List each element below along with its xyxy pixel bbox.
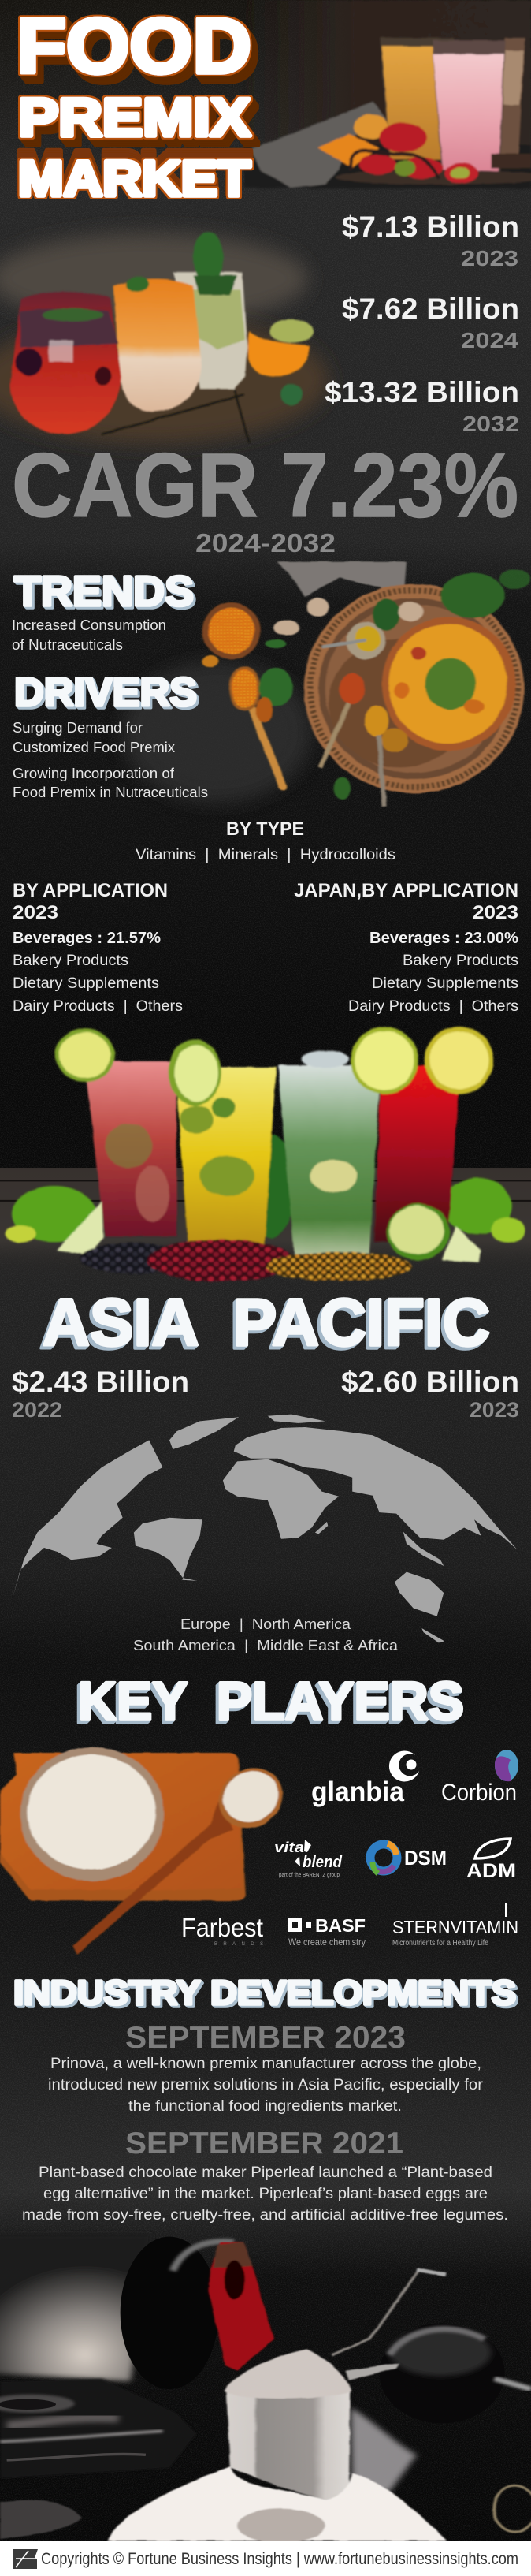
stat: market size 2023: 2023 <box>461 246 518 270</box>
footer logo <box>13 2549 38 2569</box>
driver text: Customized Food Premix <box>13 740 175 755</box>
heading: ASIA PACIFIC: ASIA PACIFIC <box>43 1285 490 1359</box>
stat: market size 2032: $13.32 Billion <box>325 376 519 408</box>
photo: four mojito glasses with limes and berries <box>0 1027 531 1288</box>
logo: vita blend: blend <box>303 1854 343 1871</box>
logo: vita blend: part of the BARENTZ group <box>279 1873 340 1878</box>
logo: DSM: DSM <box>404 1846 447 1870</box>
Japan by application segment: Beverages : 23.00% <box>369 930 518 947</box>
by type segment <box>136 818 395 863</box>
development: September 2023: Prinova, a well-known premix manufacturer across the globe, <box>50 2056 481 2072</box>
title: FOOD PREMIX MARKET <box>17 2 251 207</box>
development: September 2023: introduced new premix solutions in Asia Pacific, especially for <box>48 2077 484 2093</box>
logo: Corbion: Corbion <box>441 1780 517 1806</box>
regional value 2023: 2023 <box>470 1398 519 1422</box>
footer bar <box>0 2541 531 2576</box>
driver text: Growing Incorporation of <box>13 766 175 781</box>
driver text: Food Premix in Nutraceuticals <box>13 785 208 800</box>
photo: three iced drinks <box>0 232 329 443</box>
development: September 2023: the functional food ingredients market. <box>128 2098 402 2115</box>
development: September 2021: Plant-based chocolate maker Piperleaf launched a “Plant-based <box>39 2164 492 2181</box>
title: FOOD PREMIX MARKET: PREMIX <box>18 88 251 147</box>
by application segment <box>13 880 183 1015</box>
Japan by application segment <box>294 880 518 1015</box>
development: September 2023: SEPTEMBER 2023 <box>125 2021 406 2055</box>
logo: glanbia: glanbia <box>311 1776 405 1807</box>
title: FOOD PREMIX MARKET: FOOD <box>17 2 251 89</box>
other regions list <box>133 1616 399 1653</box>
photo: spiced lentil dish on copper plate <box>122 561 530 806</box>
regional value 2023 <box>341 1366 519 1422</box>
stat: market size 2032: 2032 <box>462 412 519 436</box>
development: September 2023 <box>48 2021 484 2115</box>
regional value 2022: 2022 <box>12 1398 62 1422</box>
driver text <box>13 720 208 800</box>
logo: ADM: ADM <box>466 1860 516 1882</box>
title: FOOD PREMIX MARKET: MARKET <box>18 151 251 207</box>
stat: market size 2023 <box>342 211 519 270</box>
stat: market size 2024 <box>342 293 519 352</box>
trend text: Increased Consumption <box>12 617 166 633</box>
trend text: of Nutraceuticals <box>12 637 123 653</box>
Japan by application segment: Bakery Products <box>403 952 518 969</box>
other regions list: South America | Middle East & Africa <box>133 1638 399 1653</box>
logo: vita blend <box>274 1840 343 1878</box>
regional value 2022 <box>12 1366 189 1422</box>
Japan by application segment: 2023 <box>473 902 518 923</box>
photo: protein powder scoop with gym weights <box>0 2234 531 2543</box>
development: September 2021: egg alternative” in the market. Piperleaf’s plant-based eggs are <box>43 2186 488 2202</box>
photo: powder bowl and wooden spoon on board <box>0 1747 292 1955</box>
Japan by application segment: JAPAN,BY APPLICATION <box>294 880 518 901</box>
logo: DSM <box>370 1843 447 1873</box>
driver text: Surging Demand for <box>13 720 143 736</box>
heading: DRIVERS: DRIVERS <box>14 669 197 714</box>
photo: smoothies on a tray <box>237 0 531 188</box>
logo: Farbest Brands: BRANDS <box>214 1942 263 1947</box>
by type segment: BY TYPE <box>226 818 304 840</box>
logo: BASF: We create chemistry <box>288 1937 366 1948</box>
by application segment: Dietary Supplements <box>13 975 159 992</box>
world map globe <box>13 1415 518 1642</box>
development: September 2021: made from soy-free, cruelty-free, and artificial additive-free legumes. <box>22 2207 508 2224</box>
logo: Farbest Brands: Farbest <box>181 1913 263 1942</box>
regional value 2022: $2.43 Billion <box>12 1366 189 1398</box>
heading: TRENDS: TRENDS <box>14 568 194 615</box>
CAGR figure: 2024-2032 <box>195 528 336 557</box>
logo: ADM <box>466 1839 516 1882</box>
logo: BASF <box>288 1915 366 1948</box>
development: September 2021: SEPTEMBER 2021 <box>125 2127 403 2160</box>
by application segment: Bakery Products <box>13 952 128 969</box>
by type segment: Vitamins | Minerals | Hydrocolloids <box>136 847 395 863</box>
trend text <box>12 617 166 653</box>
stat: market size 2024: 2024 <box>461 328 518 352</box>
Japan by application segment: Dietary Supplements <box>372 975 518 992</box>
by application segment: BY APPLICATION <box>13 880 168 901</box>
heading: INDUSTRY DEVELOPMENTS: INDUSTRY DEVELOPMENTS <box>13 1974 516 2012</box>
logo: BASF: BASF <box>315 1915 366 1936</box>
Japan by application segment: Dairy Products | Others <box>348 998 518 1015</box>
other regions list: Europe | North America <box>180 1616 351 1632</box>
logo: Stern Vitamin: STERNVITAMIN <box>392 1917 518 1937</box>
development: September 2021 <box>22 2127 508 2224</box>
stat: market size 2023: $7.13 Billion <box>342 211 519 243</box>
by application segment: Dairy Products | Others <box>13 998 183 1015</box>
heading: KEY PLAYERS: KEY PLAYERS <box>78 1671 464 1732</box>
logo: Stern Vitamin <box>392 1903 518 1948</box>
by application segment: 2023 <box>13 902 58 923</box>
logo: Stern Vitamin: Micronutrients for a Healthy Life <box>392 1939 488 1948</box>
logo: Corbion <box>441 1750 518 1806</box>
regional value 2023: $2.60 Billion <box>341 1366 519 1398</box>
logo: vita blend: vita <box>274 1840 304 1855</box>
by application segment: Beverages : 21.57% <box>13 930 161 947</box>
logo: glanbia <box>311 1751 419 1807</box>
stat: market size 2024: $7.62 Billion <box>342 293 519 325</box>
stat: market size 2032 <box>325 376 519 436</box>
